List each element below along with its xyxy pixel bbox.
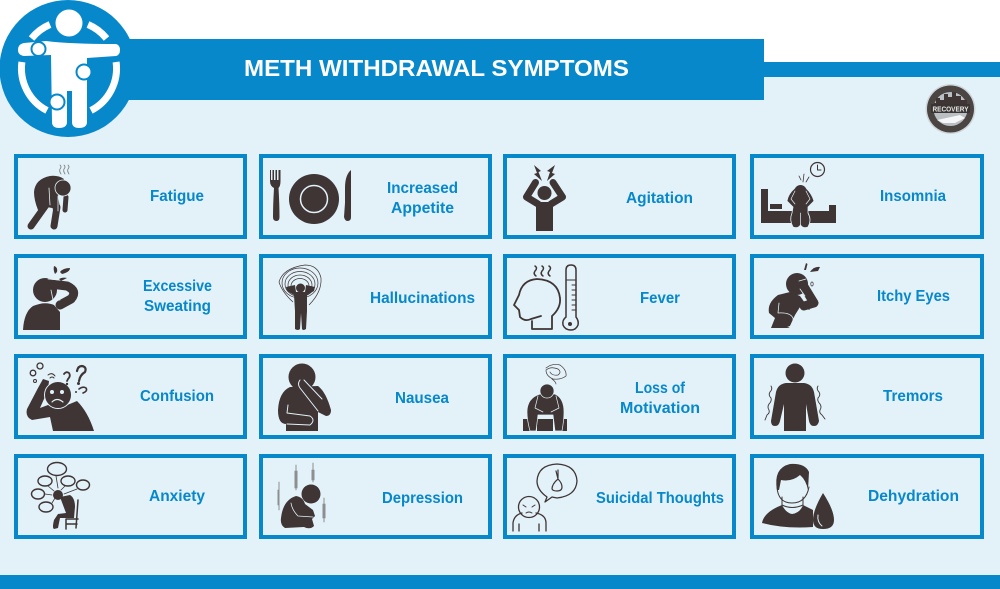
title: METH WITHDRAWAL SYMPTOMS bbox=[244, 55, 629, 81]
panel: Loss of Motivation: Motivation bbox=[620, 400, 700, 417]
header strip bbox=[764, 62, 1000, 77]
title banner bbox=[125, 39, 764, 100]
label: Insomnia bbox=[880, 188, 946, 205]
panel: Fever bbox=[505, 256, 734, 337]
icon: body pain emblem bbox=[0, 0, 136, 137]
panel: Excessive Sweating: Sweating bbox=[144, 298, 211, 315]
icon: person with thought bubble bbox=[513, 464, 577, 531]
label: Agitation bbox=[626, 190, 693, 207]
icon: curled-up person bbox=[278, 463, 325, 528]
panel: Fatigue bbox=[16, 156, 245, 237]
footer band bbox=[0, 575, 1000, 589]
panel: Loss of Motivation bbox=[505, 356, 734, 437]
panel: Insomnia bbox=[752, 156, 982, 237]
icon: head and thermometer bbox=[514, 265, 578, 330]
icon: plate and cutlery bbox=[270, 170, 351, 224]
panel: Itchy Eyes bbox=[752, 256, 982, 337]
panel: Dehydration bbox=[752, 456, 982, 537]
panel: Confusion bbox=[16, 356, 245, 437]
panel: Hallucinations bbox=[261, 256, 490, 337]
label: Increased bbox=[387, 180, 458, 197]
label: Nausea bbox=[395, 390, 449, 407]
label: Hallucinations bbox=[370, 290, 475, 307]
label: Dehydration bbox=[868, 488, 959, 505]
panel: Suicidal Thoughts bbox=[505, 456, 734, 537]
label: Fatigue bbox=[150, 188, 204, 205]
label: Confusion bbox=[140, 388, 214, 405]
label: Itchy Eyes bbox=[877, 288, 950, 305]
panel: Excessive Sweating bbox=[16, 256, 245, 337]
label: Anxiety bbox=[149, 488, 205, 505]
label: Excessive bbox=[143, 278, 212, 295]
icon: person rubbing eye bbox=[769, 263, 820, 328]
panel: Agitation bbox=[505, 156, 734, 237]
panel: Depression bbox=[261, 456, 490, 537]
panel: Increased Appetite: Appetite bbox=[391, 200, 454, 217]
logo: Carolina Recovery badge bbox=[926, 84, 976, 134]
panel: Increased Appetite bbox=[261, 156, 490, 237]
icon: person with spiral thoughts bbox=[279, 265, 321, 330]
icon: nauseous person bbox=[278, 364, 331, 431]
label: Loss of bbox=[635, 380, 686, 397]
icon: agitated person bbox=[526, 165, 562, 231]
panel: Tremors bbox=[752, 356, 982, 437]
label: Tremors bbox=[883, 388, 943, 405]
icon: person with water drop bbox=[762, 464, 834, 529]
label: Suicidal Thoughts bbox=[596, 490, 724, 507]
icon: trembling person bbox=[765, 364, 825, 431]
label: Depression bbox=[382, 490, 463, 507]
icon: confused person bbox=[27, 363, 94, 431]
label: Fever bbox=[640, 290, 680, 307]
panel: Anxiety bbox=[16, 456, 245, 537]
icon: person wiping sweat bbox=[23, 266, 74, 330]
icon: seated unmotivated person bbox=[523, 364, 567, 431]
logo: Carolina Recovery badge: RECOVERY bbox=[932, 106, 969, 114]
icon: fatigue bbox=[31, 165, 71, 226]
icon: anxious seated person bbox=[32, 462, 90, 529]
icon: person awake on bed bbox=[761, 162, 836, 228]
panel: Nausea bbox=[261, 356, 490, 437]
